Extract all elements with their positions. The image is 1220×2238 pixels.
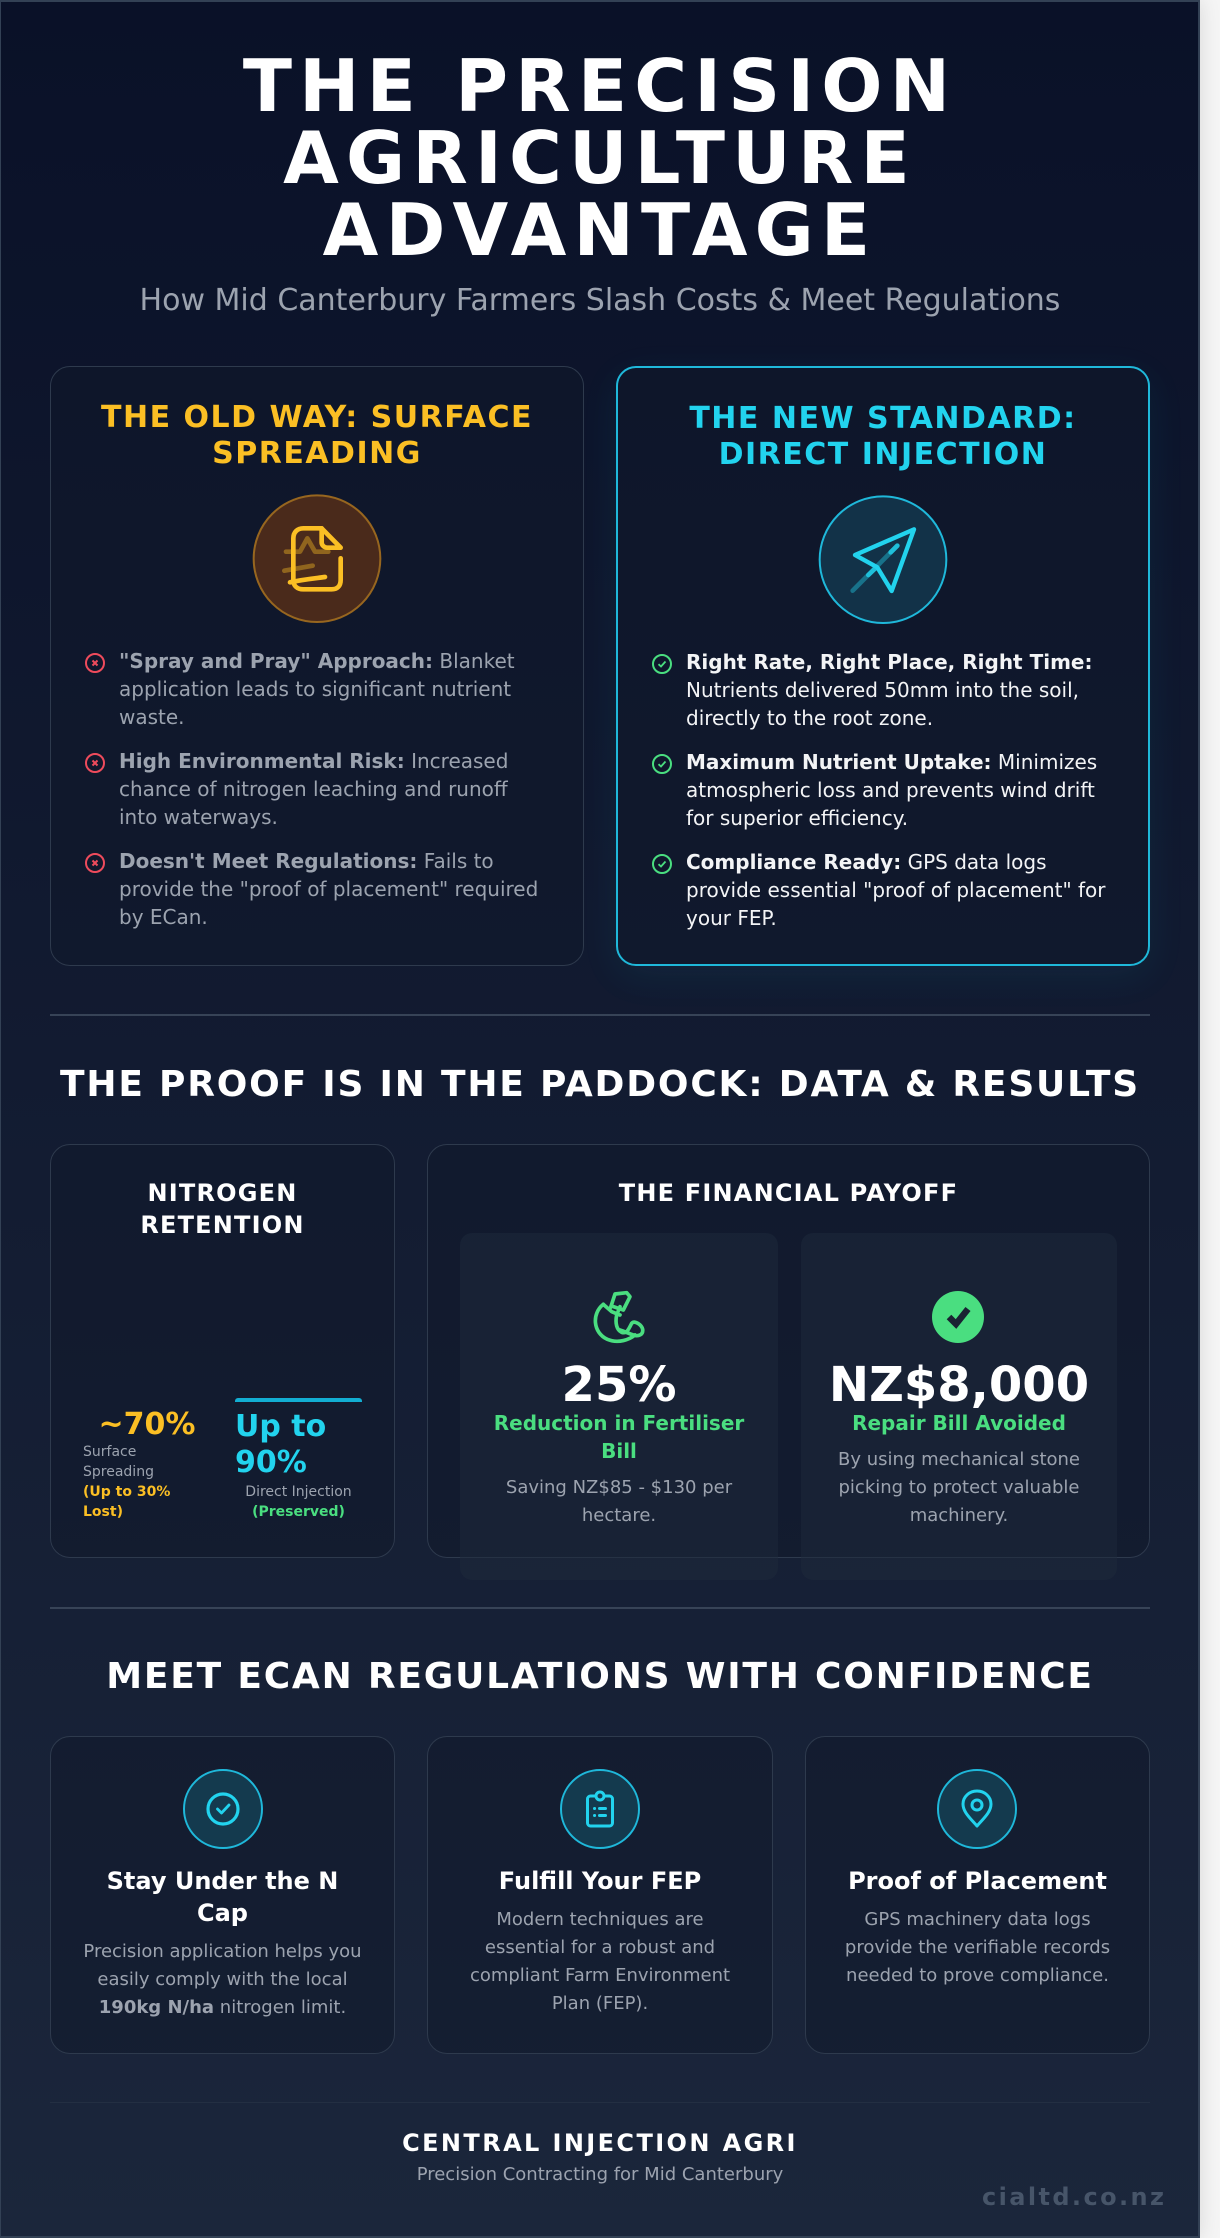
- text: stone picking: [838, 1449, 1080, 1526]
- stat: direct injection 90 percent: Up to: [235, 1409, 326, 1444]
- text: N cap: Precision application helps you: [83, 1941, 362, 1962]
- text: FEP: essential for a robust and: [485, 1937, 715, 1958]
- text: FEP: [470, 1867, 730, 2014]
- text: spray and pray: [119, 649, 515, 729]
- icon: red cross 3: [85, 853, 105, 873]
- title: ADVANTAGE: [323, 188, 877, 272]
- text: N cap: Stay Under the N: [107, 1867, 338, 1895]
- label: repair bill avoided: Repair Bill Avoided: [852, 1411, 1066, 1435]
- text: N cap: [83, 1867, 362, 2018]
- icon: green leaf wrench: [594, 1290, 645, 1344]
- text: spray and pray: application leads to significant nutrient: [119, 677, 511, 701]
- text: right rate: Nutrients delivered 50mm into the soil,: [686, 678, 1079, 702]
- panel: nitrogen retention: [50, 1144, 395, 1558]
- heading: nitrogen retention: RETENTION: [140, 1211, 305, 1239]
- stat: surface spreading 70 percent: [83, 1407, 195, 1520]
- card: stay under the N cap: [50, 1736, 395, 2054]
- text: stone picking: By using mechanical stone: [838, 1449, 1080, 1470]
- icon: green check 1: [652, 654, 672, 674]
- icon: clipboard: [560, 1769, 640, 1849]
- text: FEP: Fulfill Your FEP: [499, 1867, 701, 1895]
- title: [243, 44, 957, 272]
- heading: old way: SPREADING: [212, 436, 422, 471]
- text: compliance ready: provide essential "proof of placement" for: [686, 878, 1106, 902]
- text: proof of placement: GPS machinery data logs: [864, 1909, 1091, 1930]
- panel: financial payoff: [427, 1144, 1150, 1558]
- text: right rate: directly to the root zone.: [686, 706, 933, 730]
- stat: direct injection 90 percent: (Preserved): [252, 1504, 345, 1520]
- stat: direct injection 90 percent: [235, 1409, 352, 1520]
- card: fertiliser reduction: [460, 1233, 778, 1580]
- stat: surface spreading 70 percent: Spreading: [83, 1464, 154, 1480]
- text: right rate: [686, 650, 1092, 730]
- text: spray and pray: "Spray and Pray" Approach: Blanket: [119, 649, 515, 673]
- heading: ecan section: MEET ECAN REGULATIONS WITH CONFIDENCE: [106, 1656, 1094, 1697]
- icon: solid green check: [932, 1291, 984, 1343]
- text: environmental risk: [119, 749, 508, 829]
- text: right rate: Right Rate, Right Place, Right Time:: [686, 650, 1092, 674]
- text: saving per hectare: Saving NZ$85 - $130 per: [506, 1477, 732, 1498]
- icon: green check 3: [652, 854, 672, 874]
- card: fulfill your FEP: [427, 1736, 772, 2054]
- bar: direct injection: [235, 1398, 362, 1402]
- text: N cap: 190kg N/ha nitrogen limit.: [99, 1997, 346, 2018]
- text: compliance ready: your FEP.: [686, 906, 777, 930]
- text: compliance ready: Compliance Ready: GPS data logs: [686, 850, 1047, 874]
- card: proof of placement: [805, 1736, 1150, 2054]
- icon: red cross 2: [85, 753, 105, 773]
- heading: nitrogen retention: NITROGEN: [147, 1179, 298, 1207]
- stat: direct injection 90 percent: 90%: [235, 1445, 307, 1480]
- text: regulations: Doesn't Meet Regulations: Fails to: [119, 849, 494, 873]
- text: FEP: Modern techniques are: [496, 1909, 704, 1930]
- text: saving per hectare: [506, 1477, 732, 1526]
- text: proof of placement: Proof of Placement: [848, 1867, 1107, 1895]
- label: reduction in fertiliser bill: Bill: [601, 1439, 637, 1463]
- text: nutrient uptake: for superior efficiency.: [686, 806, 908, 830]
- text: nutrient uptake: Maximum Nutrient Uptake: Minimizes: [686, 750, 1097, 774]
- stat: direct injection 90 percent: Direct Injection: [245, 1484, 352, 1500]
- stat: surface spreading 70 percent: ~70%: [99, 1407, 195, 1442]
- watermark: cialtd.co.nz: [982, 2183, 1166, 2211]
- text: proof of placement: [845, 1867, 1110, 1986]
- icon: document in amber circle: [252, 494, 382, 623]
- stat: surface spreading 70 percent: (Up to 30%: [83, 1484, 170, 1500]
- heading: new standard: DIRECT INJECTION: [719, 437, 1047, 472]
- text: saving per hectare: hectare.: [582, 1505, 656, 1526]
- text: environmental risk: chance of nitrogen leaching and runoff: [119, 777, 508, 801]
- title: AGRICULTURE: [283, 116, 917, 200]
- title: THE PRECISION: [243, 44, 957, 128]
- text: regulations: [119, 849, 538, 929]
- heading: new standard: THE NEW STANDARD:: [689, 401, 1077, 436]
- heading: proof section: THE PROOF IS IN THE PADDOCK: DATA & RESULTS: [60, 1064, 1140, 1105]
- footer: tagline: Precision Contracting for Mid Canterbury: [417, 2164, 783, 2185]
- text: nutrient uptake: [686, 750, 1097, 830]
- heading: old way: THE OLD WAY: SURFACE: [101, 400, 533, 435]
- icon: check circle: [183, 1769, 263, 1849]
- text: regulations: provide the "proof of placement" required: [119, 877, 538, 901]
- text: nutrient uptake: atmospheric loss and prevents wind drift: [686, 778, 1095, 802]
- text: regulations: by ECan.: [119, 905, 208, 929]
- heading: nitrogen retention: [140, 1179, 305, 1239]
- card: repair bill avoided: [801, 1233, 1117, 1580]
- text: compliance ready: [686, 850, 1106, 930]
- subtitle: How Mid Canterbury Farmers Slash Costs & Meet Regulations: [140, 283, 1060, 318]
- stat: 25 percent: 25%: [562, 1357, 676, 1413]
- stat: NZ$8,000: NZ$8,000: [829, 1357, 1089, 1413]
- label: reduction in fertiliser bill: [494, 1411, 744, 1463]
- icon: red cross 1: [85, 653, 105, 673]
- label: reduction in fertiliser bill: Reduction in Fertiliser: [494, 1411, 744, 1435]
- text: proof of placement: provide the verifiable records: [845, 1937, 1110, 1958]
- text: environmental risk: into waterways.: [119, 805, 278, 829]
- text: stone picking: picking to protect valuable: [838, 1477, 1079, 1498]
- icon: map pin: [937, 1769, 1017, 1849]
- icon: paper plane in cyan circle: [818, 495, 948, 624]
- icon: green check 2: [652, 754, 672, 774]
- text: spray and pray: waste.: [119, 705, 185, 729]
- text: proof of placement: needed to prove compliance.: [846, 1965, 1109, 1986]
- heading: old way: [101, 400, 533, 471]
- footer: company name: CENTRAL INJECTION AGRI: [402, 2129, 798, 2157]
- panel: old way surface spreading: [50, 366, 584, 966]
- text: FEP: compliant Farm Environment: [470, 1965, 730, 1986]
- heading: financial payoff: THE FINANCIAL PAYOFF: [619, 1179, 958, 1207]
- text: FEP: Plan (FEP).: [552, 1993, 648, 2014]
- stat: surface spreading 70 percent: Surface: [83, 1444, 136, 1460]
- stat: surface spreading 70 percent: Lost): [83, 1504, 123, 1520]
- text: N cap: Cap: [197, 1899, 248, 1927]
- text: N cap: easily comply with the local: [97, 1969, 348, 1990]
- heading: new standard: [689, 401, 1077, 472]
- panel: new standard direct injection: [616, 366, 1150, 966]
- text: environmental risk: High Environmental Risk: Increased: [119, 749, 508, 773]
- text: stone picking: machinery.: [910, 1505, 1008, 1526]
